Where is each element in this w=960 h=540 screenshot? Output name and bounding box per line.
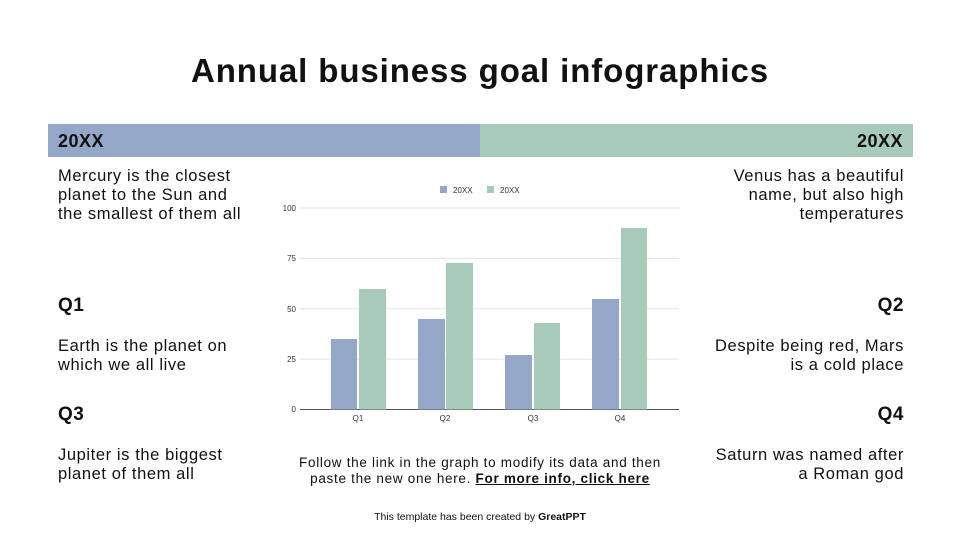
bar chart: Q2 (440, 414, 451, 423)
Q3 block: Q3 (58, 404, 84, 425)
title: Annual business goal infographics (191, 52, 769, 89)
Q1 block: which we all live (58, 356, 186, 374)
Q4 block: Saturn was named after (716, 446, 904, 464)
Q3 block: Jupiter is the biggest (58, 446, 223, 464)
header bar: right year: 20XX (857, 131, 903, 151)
Q4 block: Q4 (878, 404, 904, 425)
header bar: left year: 20XX (58, 131, 104, 151)
footer credit: This template has been created by GreatPPT (374, 511, 586, 523)
Q1 block: Earth is the planet on (58, 337, 227, 355)
text: mercury: Mercury is the closest (58, 167, 231, 185)
Q2 block: Q2 (878, 295, 904, 316)
bar chart: 20XX (500, 186, 520, 195)
bar chart: Q3 (528, 414, 539, 423)
caption (299, 455, 661, 486)
text: mercury: the smallest of them all (58, 205, 241, 223)
bar chart: 20XX (453, 186, 473, 195)
text: venus: name, but also high (749, 186, 904, 204)
text: venus: temperatures (800, 205, 904, 223)
text: mercury (58, 167, 241, 223)
Q2 block: Despite being red, Mars (715, 337, 904, 355)
Q4 block (716, 404, 904, 483)
bar chart: Q4 (615, 414, 626, 423)
bar chart: 50 (287, 305, 297, 314)
Q2 block (715, 295, 904, 374)
Q2 block: is a cold place (790, 356, 904, 374)
bar chart: 0 (292, 405, 297, 414)
text: venus (734, 167, 904, 223)
bar chart: 75 (287, 254, 297, 263)
Q1 block (58, 295, 227, 374)
header bar: right year (480, 124, 913, 157)
bar chart: 25 (287, 355, 297, 364)
caption: paste the new one here. For more info, click here (310, 471, 650, 486)
header bar: left year (48, 124, 480, 157)
bar chart: Q1 (353, 414, 364, 423)
Q1 block: Q1 (58, 295, 84, 316)
Q3 block (58, 404, 223, 483)
text: venus: Venus has a beautiful (734, 167, 904, 185)
bar chart: 100 (283, 204, 297, 213)
Q4 block: a Roman god (798, 465, 904, 483)
Q3 block: planet of them all (58, 465, 194, 483)
caption: Follow the link in the graph to modify its data and then (299, 455, 661, 470)
text: mercury: planet to the Sun and (58, 186, 227, 204)
